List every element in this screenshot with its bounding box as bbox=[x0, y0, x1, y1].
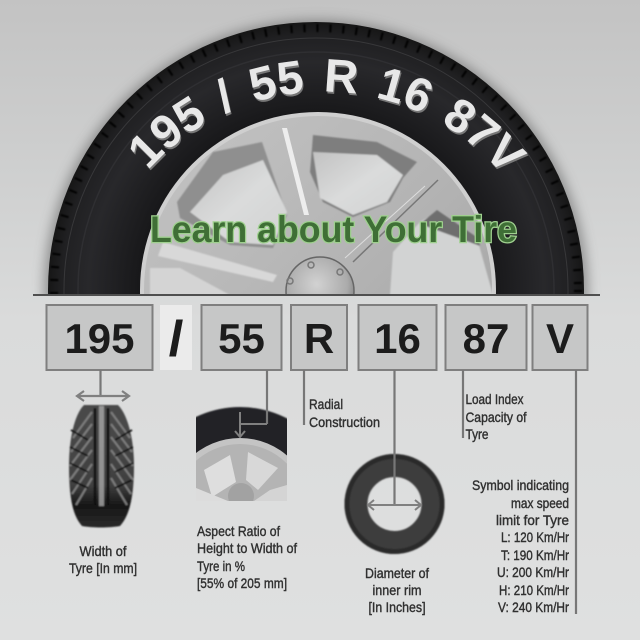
text: speed ratings: T: 190 Km/Hr bbox=[501, 547, 569, 563]
text: tyre width bbox=[69, 543, 137, 576]
connector and text: radial construction bbox=[304, 370, 380, 430]
text: aspect ratio: Aspect Ratio of bbox=[197, 523, 280, 539]
text: tyre width: Width of bbox=[80, 543, 127, 559]
text: aspect ratio: Tyre in % bbox=[197, 558, 245, 574]
code box: 55 bbox=[202, 305, 282, 370]
code box: slash bbox=[160, 305, 192, 370]
text: speed ratings: V: 240 Km/Hr bbox=[498, 599, 569, 615]
text: rim diameter bbox=[365, 565, 429, 615]
icon: tyre tread bbox=[69, 405, 134, 528]
text: rim diameter: [In Inches] bbox=[368, 599, 426, 615]
connector and height arrow bbox=[235, 370, 267, 437]
text: speed ratings: U: 200 Km/Hr bbox=[497, 564, 569, 580]
icon: tyre cross-section crop bbox=[196, 406, 287, 501]
icon: tyre ring with rim diameter arrow bbox=[347, 370, 442, 552]
code box: R bbox=[291, 305, 347, 370]
code box: 87: 87 bbox=[463, 315, 509, 362]
main tire and wheel illustration bbox=[37, 14, 595, 294]
code box: 55: 55 bbox=[218, 315, 265, 362]
connector and text: load index bbox=[463, 370, 527, 442]
sidewall tyre size text: 195 / 55 R 16 87V bbox=[130, 59, 528, 170]
connector and text: radial construction: Construction bbox=[309, 414, 380, 430]
text: tyre width: Tyre [In mm] bbox=[69, 560, 137, 576]
title: Learn about Your Tire bbox=[150, 209, 517, 250]
text: speed ratings: H: 210 Km/Hr bbox=[499, 582, 569, 598]
code box: 195: 195 bbox=[64, 315, 135, 362]
code box: R: R bbox=[304, 315, 334, 362]
connector and text: radial construction: Radial bbox=[309, 396, 343, 412]
code box: V bbox=[532, 305, 588, 370]
text: rim diameter: Diameter of bbox=[365, 565, 429, 581]
text: speed ratings: limit for Tyre bbox=[496, 512, 569, 528]
code box: 16: 16 bbox=[374, 315, 421, 362]
connector and width arrow bbox=[77, 370, 129, 401]
text: aspect ratio: Height to Width of bbox=[197, 540, 297, 556]
text: speed ratings bbox=[472, 477, 569, 615]
text: speed ratings: L: 120 Km/Hr bbox=[501, 529, 569, 545]
text: rim diameter: inner rim bbox=[372, 582, 422, 598]
text: aspect ratio: [55% of 205 mm] bbox=[197, 575, 287, 591]
code box: slash: / bbox=[169, 313, 183, 366]
text: speed ratings: Symbol indicating bbox=[472, 477, 569, 493]
code box: 87 bbox=[446, 305, 526, 370]
text: speed ratings: max speed bbox=[511, 495, 569, 511]
text: aspect ratio bbox=[197, 523, 297, 591]
ground line bbox=[33, 294, 600, 296]
connector: speed symbol bbox=[575, 370, 577, 614]
code box: 16 bbox=[358, 305, 436, 370]
code box: 195 bbox=[46, 305, 152, 370]
code box: V: V bbox=[546, 315, 574, 362]
connector and text: load index: Load Index bbox=[466, 391, 524, 407]
connector and text: load index: Tyre bbox=[466, 426, 489, 442]
connector and text: load index: Capacity of bbox=[466, 409, 527, 425]
